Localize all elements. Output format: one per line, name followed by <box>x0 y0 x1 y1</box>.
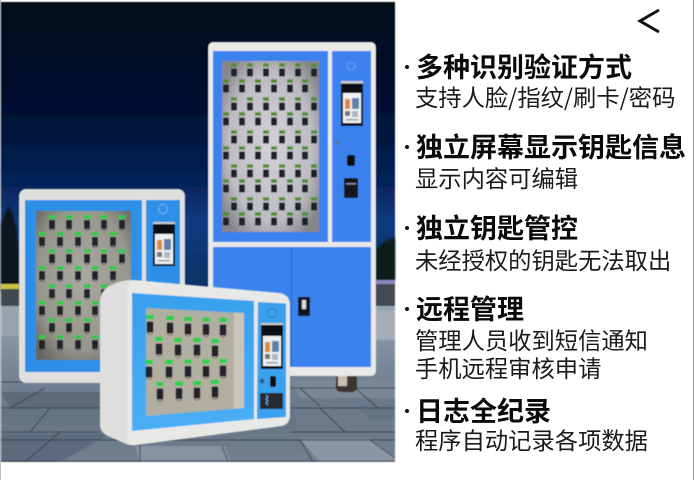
pavement <box>1 306 395 462</box>
feature: key control: 未经授权的钥匙无法取出 <box>415 242 671 276</box>
feature: key control: 独立钥匙管控 <box>416 207 578 246</box>
medium wall cabinet <box>19 189 185 383</box>
left trees and lights <box>1 206 20 306</box>
medium cabinet key window <box>36 211 131 360</box>
medium cabinet face screen <box>153 204 175 266</box>
feature: independent screen <box>405 126 686 194</box>
feature: remote management <box>405 288 648 384</box>
big cabinet right blue panel <box>332 51 371 242</box>
big cabinet key window <box>222 61 319 232</box>
feature: key control <box>405 207 671 276</box>
feature: remote management: 管理人员收到短信通知 <box>415 322 648 356</box>
feature: remote management: 远程管理 <box>416 288 524 327</box>
front cabinet key window <box>145 308 244 416</box>
feature: remote management: 手机远程审核申请 <box>415 350 601 384</box>
back arrow icon <box>640 10 659 32</box>
feature: verification methods: 支持人脸/指纹/刷卡/密码 <box>415 79 675 113</box>
big cabinet face screen <box>335 62 363 198</box>
front cabinet control panel <box>257 302 286 419</box>
background: night sky and pavement <box>1 2 395 462</box>
feature: independent screen: 显示内容可编辑 <box>415 160 578 194</box>
big cabinet left blue panel <box>213 51 328 242</box>
feature: full log: 程序自动记录各项数据 <box>415 422 648 456</box>
feature: full log: 日志全纪录 <box>416 390 551 429</box>
front wall cabinet <box>100 280 290 445</box>
front cabinet blue window frame <box>132 293 254 431</box>
feature: verification methods <box>405 46 675 113</box>
right trees and lights <box>376 238 395 310</box>
big cabinet lower doors <box>213 247 371 367</box>
feature: full log <box>405 390 648 456</box>
big floor cabinet <box>208 42 376 392</box>
feature: independent screen: 独立屏幕显示钥匙信息 <box>416 126 686 165</box>
page frame lines <box>0 0 1 480</box>
feature: verification methods: 多种识别验证方式 <box>416 46 632 85</box>
